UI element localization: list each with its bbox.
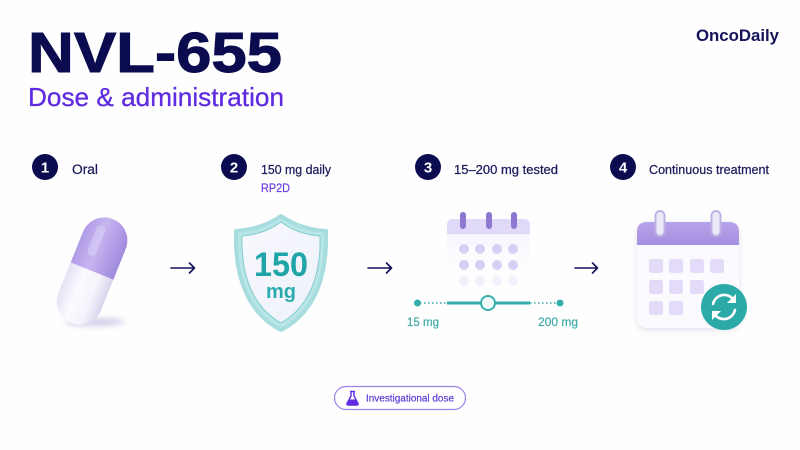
arrow 1 xyxy=(171,263,194,273)
badge: investigational dose: Investigational dose xyxy=(366,392,454,404)
step 4 heading: Continuous treatment xyxy=(649,162,769,177)
step 4 heading: 4 xyxy=(619,160,628,176)
step 3 heading: 3 xyxy=(424,160,432,176)
step 1 heading xyxy=(32,154,98,180)
title: NVL-655 xyxy=(28,21,282,85)
dose range slider xyxy=(407,296,578,329)
icon: faded calendar xyxy=(447,212,530,292)
step 4 heading xyxy=(610,154,769,180)
icon: calendar with repeat xyxy=(637,211,747,330)
step 2 heading: 2 xyxy=(230,160,238,176)
dose range slider: 200 mg xyxy=(538,315,578,329)
step 3 heading xyxy=(415,154,558,180)
arrow 3 xyxy=(575,263,598,273)
icon: shield with dose xyxy=(236,216,326,330)
step 1 heading: Oral xyxy=(72,162,98,177)
step 2 heading: 150 mg daily xyxy=(261,162,331,177)
step 1 heading: 1 xyxy=(41,160,49,176)
step 2 heading xyxy=(221,154,331,195)
dose range slider: 15 mg xyxy=(407,315,439,329)
badge: investigational dose xyxy=(334,386,466,410)
step 2 heading: RP2D xyxy=(261,181,290,195)
icon: shield with dose: mg xyxy=(266,281,296,303)
icon: capsule xyxy=(50,210,134,332)
arrow 2 xyxy=(368,263,392,273)
subtitle: Dose & administration xyxy=(28,82,284,112)
step 3 heading: 15–200 mg tested xyxy=(454,162,558,177)
logo: OncoDaily xyxy=(696,26,780,45)
icon: shield with dose: 150 xyxy=(254,246,308,284)
